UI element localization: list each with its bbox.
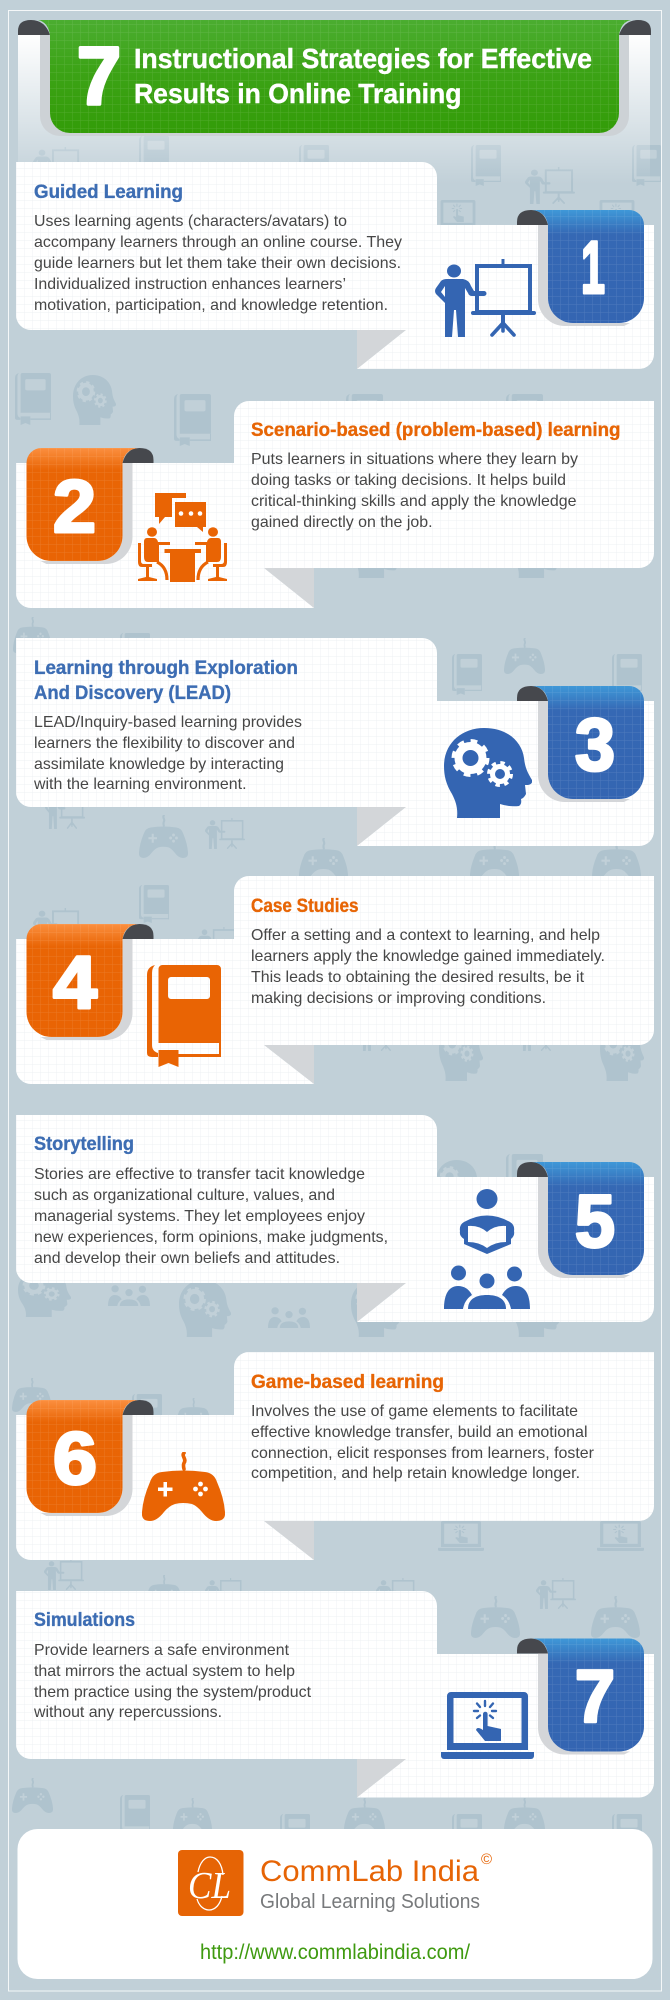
body text: managerial systems. They let employees enjoy	[34, 1208, 365, 1225]
icon: book	[147, 965, 221, 1067]
panel 3: exploration and discovery	[16, 638, 654, 846]
body text: learners apply the knowledge gained immediately.	[251, 948, 605, 965]
icon: head with gears	[444, 728, 532, 818]
body text: guide learners but let them take their own decisions.	[34, 255, 401, 272]
body text: gained directly on the job.	[251, 514, 432, 531]
body text: without any repercussions.	[33, 1704, 222, 1721]
company name: CommLab India	[260, 1855, 479, 1888]
speech panel	[16, 876, 654, 1084]
body text: them practice using the system/product	[34, 1684, 312, 1701]
panel 2: scenario-based learning	[16, 401, 654, 608]
body text: Individualized instruction enhances learners’	[34, 276, 346, 293]
banner shadow	[40, 35, 629, 136]
tail	[357, 330, 406, 369]
panel grid	[16, 401, 654, 608]
body text: Puts learners in situations where they learn by	[251, 451, 578, 468]
tail	[264, 1521, 314, 1560]
heading: Simulations	[34, 1610, 135, 1631]
body text: Offer a setting and a context to learning, and help	[251, 927, 600, 944]
body text: connection, elicit responses from learners, foster	[251, 1445, 594, 1462]
body text: competition, and help retain knowledge longer.	[251, 1465, 580, 1482]
panel grid	[16, 1115, 654, 1322]
speech panel	[16, 1591, 654, 1798]
badge 2	[26, 448, 154, 564]
tail	[357, 1759, 406, 1798]
badge 5	[517, 1162, 644, 1278]
badge 1	[517, 210, 644, 326]
tail	[264, 1045, 314, 1084]
badge 7: 7	[575, 1655, 615, 1738]
body text: that mirrors the actual system to help	[34, 1663, 295, 1680]
CommLab logo mark: CL	[188, 1865, 231, 1907]
badge 2: 2	[53, 465, 96, 548]
tail	[357, 807, 406, 846]
website url: http://www.commlabindia.com/	[200, 1941, 470, 1964]
body text: assimilate knowledge by interacting	[34, 756, 284, 773]
body text: This leads to obtaining the desired results, be it	[251, 969, 585, 986]
speech panel	[16, 162, 654, 369]
tail	[357, 1283, 406, 1322]
icon: meeting at a table	[138, 493, 227, 582]
heading: Case Studies	[251, 896, 358, 917]
panel 7: simulations	[16, 1591, 654, 1798]
panel grid	[16, 1352, 654, 1560]
body text: Uses learning agents (characters/avatars) to	[34, 213, 347, 230]
footer card	[18, 1829, 652, 1979]
heading: And Discovery (LEAD)	[34, 683, 231, 704]
speech panel	[16, 1115, 654, 1322]
body text	[34, 1166, 388, 1267]
body text	[251, 451, 578, 531]
body text: motivation, participation, and knowledge retention.	[34, 297, 388, 314]
body text: LEAD/Inquiry-based learning provides	[34, 714, 302, 731]
body text: learners the flexibility to discover and	[34, 735, 295, 752]
body text	[251, 1403, 594, 1482]
panel grid	[16, 162, 654, 369]
badge 4: 4	[53, 941, 97, 1024]
body text: Involves the use of game elements to facilitate	[251, 1403, 578, 1420]
icon: storyteller reading to a group	[444, 1189, 530, 1309]
banner curl left	[18, 20, 50, 35]
body text: Provide learners a safe environment	[34, 1642, 290, 1659]
copyright mark: ©	[481, 1851, 492, 1868]
body text: accompany learners through an online course. They	[34, 234, 402, 251]
badge 5: 5	[575, 1180, 615, 1263]
body text: new experiences, form opinions, make judgments,	[34, 1229, 388, 1246]
body text: effective knowledge transfer, build an emotional	[251, 1424, 588, 1441]
body text	[33, 1642, 312, 1721]
heading: Guided Learning	[34, 182, 183, 203]
badge 3: 3	[575, 703, 615, 786]
body text	[33, 714, 302, 793]
title line 1: Instructional Strategies for Effective	[134, 43, 592, 74]
panel 1: guided learning	[16, 162, 654, 369]
CommLab logo mark	[178, 1850, 244, 1916]
speech panel	[16, 401, 654, 608]
body text	[251, 927, 605, 1007]
panel grid	[16, 876, 654, 1084]
body text: doing tasks or taking decisions. It helps build	[251, 472, 566, 489]
badge 1: 1	[581, 226, 605, 309]
badge 3	[517, 686, 644, 802]
panel grid	[16, 1591, 654, 1798]
badge 6: 6	[53, 1417, 97, 1500]
heading	[34, 658, 298, 704]
tagline: Global Learning Solutions	[260, 1891, 480, 1913]
title line 2: Results in Online Training	[134, 78, 462, 109]
body text: and develop their own beliefs and attitudes.	[34, 1250, 340, 1267]
heading: Learning through Exploration	[34, 658, 298, 679]
panel grid	[16, 638, 654, 846]
banner ribbon	[38, 20, 631, 133]
banner grid	[38, 20, 631, 133]
body text: critical-thinking skills and apply the knowledge	[251, 493, 577, 510]
body text: Stories are effective to transfer tacit knowledge	[34, 1166, 365, 1183]
body text: making decisions or improving conditions.	[251, 990, 546, 1007]
banner white back strip	[18, 34, 650, 184]
badge 7	[517, 1638, 644, 1754]
speech panel	[16, 638, 654, 846]
speech panel	[16, 1352, 654, 1560]
title number: 7	[77, 31, 121, 122]
title banner	[18, 20, 651, 184]
footer panel	[18, 1829, 652, 1979]
icon: presenter with board	[435, 259, 536, 337]
tail	[264, 568, 314, 608]
heading: Storytelling	[34, 1134, 134, 1155]
body text	[34, 213, 402, 314]
badge 6	[26, 1400, 154, 1516]
icon: laptop with touch	[441, 1692, 534, 1759]
panel 5: storytelling	[16, 1115, 654, 1322]
body text: with the learning environment.	[33, 776, 246, 793]
heading: Scenario-based (problem-based) learning	[251, 420, 620, 441]
banner curl right	[619, 20, 651, 35]
panel 4: case studies	[16, 876, 654, 1084]
panel 6: game-based learning	[16, 1352, 654, 1560]
badge 4	[26, 924, 154, 1040]
body text: such as organizational culture, values, and	[34, 1187, 335, 1204]
heading: Game-based learning	[251, 1372, 444, 1393]
icon: game controller	[142, 1453, 225, 1521]
